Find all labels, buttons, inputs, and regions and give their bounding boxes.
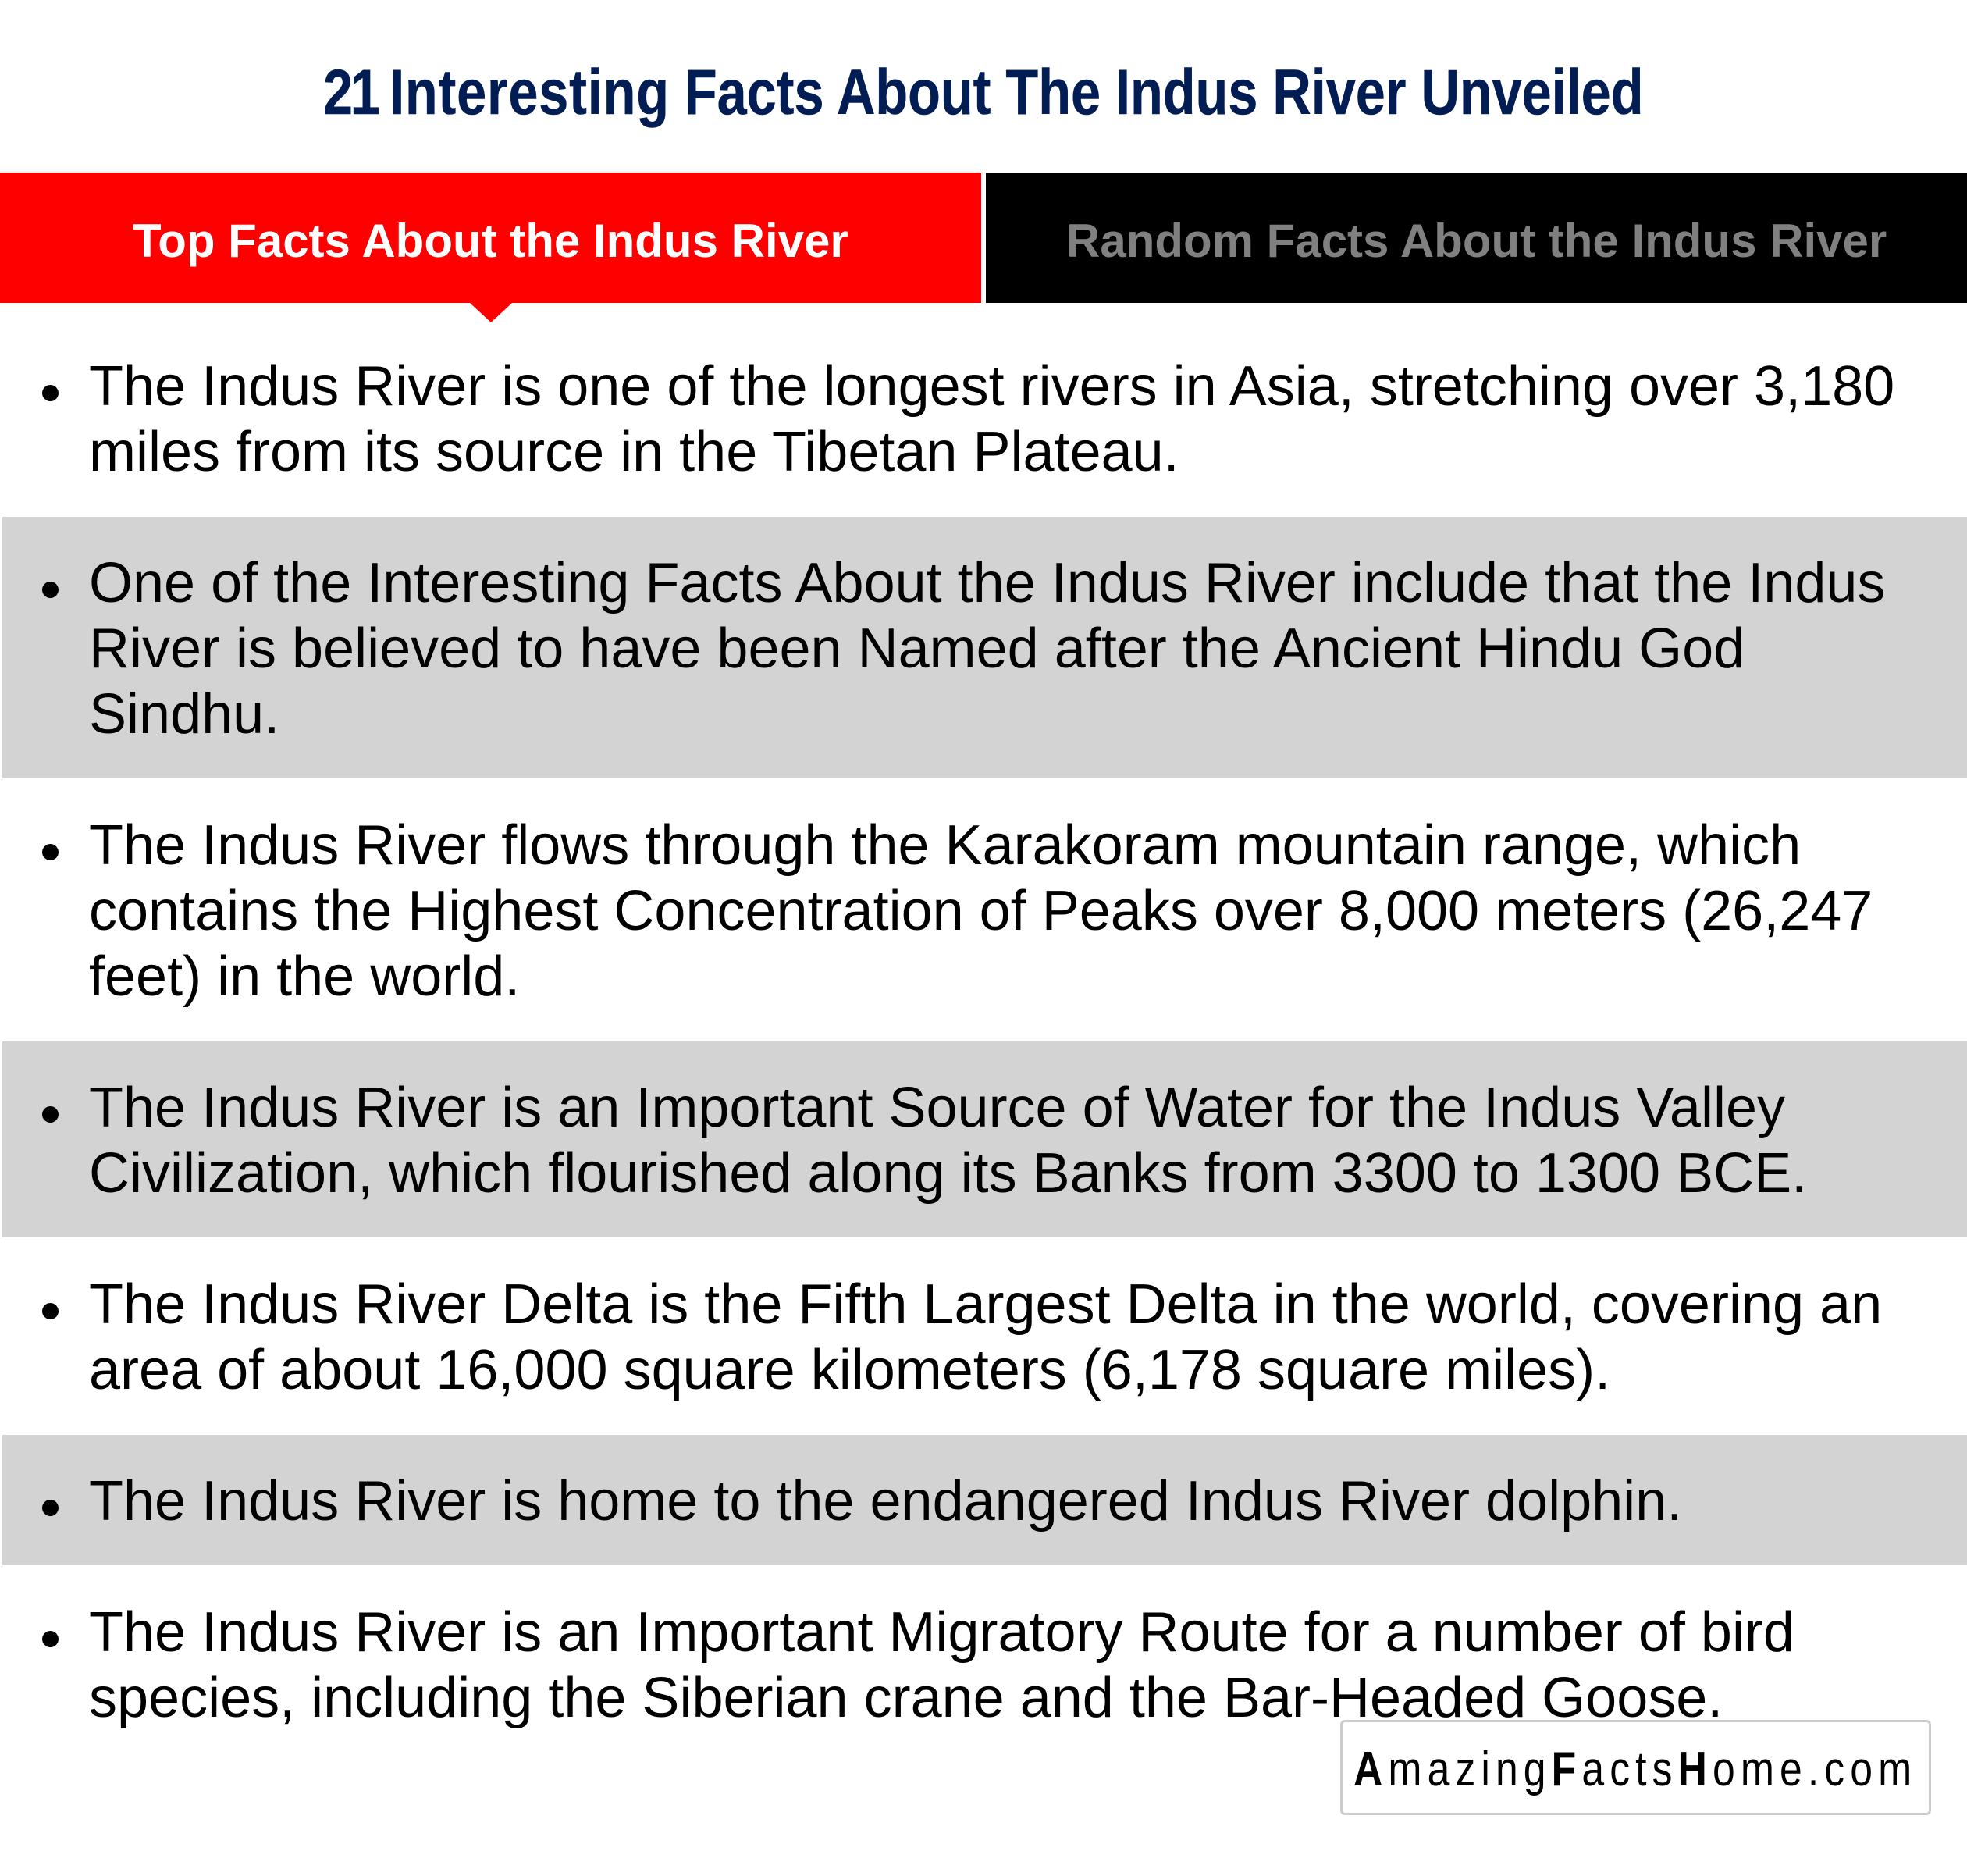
tab: top facts: Top Facts About the Indus River xyxy=(133,215,848,267)
fact 7: species, including the Siberian crane and the Bar-Headed Goose. xyxy=(89,1667,1723,1729)
fact 3: feet) in the world. xyxy=(89,945,520,1008)
tab pointer xyxy=(470,303,512,322)
fact 2: River is believed to have been Named after the Ancient Hindu God xyxy=(89,618,1745,680)
fact 4: The Indus River is an Important Source of Water for the Indus Valley xyxy=(89,1077,1785,1139)
fact 4 xyxy=(42,1077,1807,1205)
tab: random facts xyxy=(986,173,1967,303)
gray band 4 xyxy=(2,1041,1967,1237)
fact 2: Sindhu. xyxy=(89,683,279,746)
watermark: AmazingFactsHome.com xyxy=(1353,1743,1917,1796)
fact 1: The Indus River is one of the longest rivers in Asia, stretching over 3,180 xyxy=(89,355,1894,418)
fact 3: contains the Highest Concentration of Peaks over 8,000 meters (26,247 xyxy=(89,880,1873,942)
title: 21 Interesting Facts About The Indus River Unveiled xyxy=(323,57,1643,128)
fact 3: The Indus River flows through the Karakoram mountain range, which xyxy=(89,814,1801,877)
gray band 2 xyxy=(2,517,1967,778)
fact 5: area of about 16,000 square kilometers (6,178 square miles). xyxy=(89,1339,1610,1401)
tab: random facts: Random Facts About the Indus River xyxy=(1066,215,1887,267)
fact 4: Civilization, which flourished along its Banks from 3300 to 1300 BCE. xyxy=(89,1142,1807,1205)
watermark xyxy=(1340,1720,1931,1815)
fact 5: The Indus River Delta is the Fifth Largest Delta in the world, covering an xyxy=(89,1273,1882,1336)
tab: top facts xyxy=(0,173,981,303)
fact 7: The Indus River is an Important Migratory Route for a number of bird xyxy=(89,1601,1794,1664)
fact 1 xyxy=(42,355,1894,483)
gray band 6 xyxy=(2,1435,1967,1565)
fact 7 xyxy=(42,1601,1794,1729)
fact 2 xyxy=(42,552,1885,746)
fact 3 xyxy=(42,814,1873,1008)
fact 5 xyxy=(42,1273,1882,1401)
fact 6: The Indus River is home to the endangered Indus River dolphin. xyxy=(89,1470,1682,1532)
fact 1: miles from its source in the Tibetan Plateau. xyxy=(89,421,1179,483)
fact 2: One of the Interesting Facts About the Indus River include that the Indus xyxy=(89,552,1885,614)
